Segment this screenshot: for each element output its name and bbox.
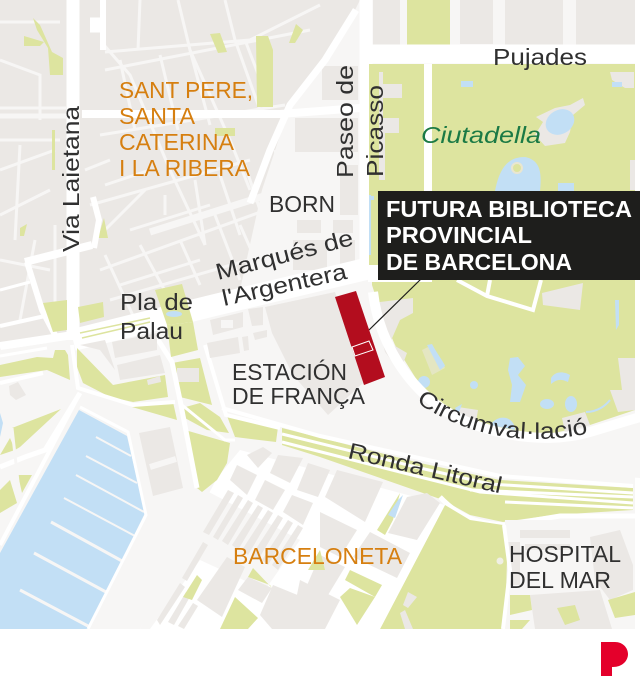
leader line — [369, 279, 421, 330]
label: Sant Pere: SANTA — [119, 103, 196, 129]
Hospital del Mar area — [505, 520, 635, 629]
curve for Circumval·lació — [416, 402, 595, 439]
callout — [378, 191, 640, 280]
label: Picasso: Picasso — [362, 85, 388, 177]
label: Sant Pere — [119, 77, 253, 181]
logo — [601, 642, 628, 676]
label: Born: BORN — [269, 191, 335, 217]
city blocks north west — [0, 0, 635, 350]
streets north west — [0, 0, 320, 330]
label: Circumval·lació: Circumval·lació — [420, 392, 586, 439]
label: Ciutadella: Ciutadella — [421, 122, 541, 148]
library site in red — [335, 291, 385, 385]
Harbour — [0, 410, 145, 629]
label: Estación de França — [232, 359, 366, 409]
label: Sant Pere: SANT PERE, — [119, 77, 253, 103]
label: Pla de Palau: Palau — [120, 318, 183, 344]
Estación de França station area — [265, 292, 363, 415]
label: Pla de Palau — [120, 289, 193, 344]
station outline — [352, 341, 373, 356]
park areas in old town — [20, 18, 303, 238]
callout: FUTURA BIBLIOTECA — [386, 196, 632, 222]
Barceloneta blocks — [140, 447, 445, 629]
label: Barceloneta: BARCELONETA — [233, 543, 403, 569]
label: Hospital del Mar — [509, 541, 621, 593]
label: l'Argentera: l'Argentera — [219, 258, 349, 311]
Pujades road — [360, 44, 640, 64]
Ronda Litoral strips — [222, 408, 640, 525]
callout: DE BARCELONA — [386, 249, 572, 275]
Ciutadella park — [369, 64, 635, 435]
label: Pla de Palau: Pla de — [120, 289, 193, 315]
main white roads north — [0, 0, 370, 346]
bottom white margin — [0, 629, 640, 682]
label: Marqués de: Marqués de — [213, 224, 356, 285]
label: Hospital del Mar: HOSPITAL — [509, 541, 621, 567]
inner circle in lake — [512, 163, 522, 173]
harbour piers — [20, 407, 146, 629]
marina warehouse — [139, 427, 183, 496]
label: Via Laietana: Via Laietana — [58, 106, 84, 252]
label: Estación de França: ESTACIÓN — [232, 359, 347, 385]
blocks around Pla de Palau — [43, 284, 267, 385]
light concourse south of park — [222, 352, 640, 478]
label: Hospital del Mar: DEL MAR — [509, 567, 611, 593]
label: Sant Pere: CATERINA — [119, 129, 235, 155]
label: Ronda Litoral: Ronda Litoral — [346, 438, 505, 498]
park paths and buildings — [368, 64, 635, 432]
right edge strip — [635, 0, 640, 629]
label: Paseo de: Paseo de — [332, 65, 358, 178]
label: Sant Pere: I LA RIBERA — [119, 155, 251, 181]
callout: PROVINCIAL — [386, 222, 532, 248]
large green park south — [380, 505, 507, 629]
label: Estación de França: DE FRANÇA — [232, 383, 366, 409]
top green plot — [407, 0, 450, 50]
waterfront road and greens west — [0, 335, 280, 545]
park water — [369, 81, 622, 430]
Circumval·lació road — [373, 292, 640, 438]
label: Pujades: Pujades — [493, 44, 587, 70]
